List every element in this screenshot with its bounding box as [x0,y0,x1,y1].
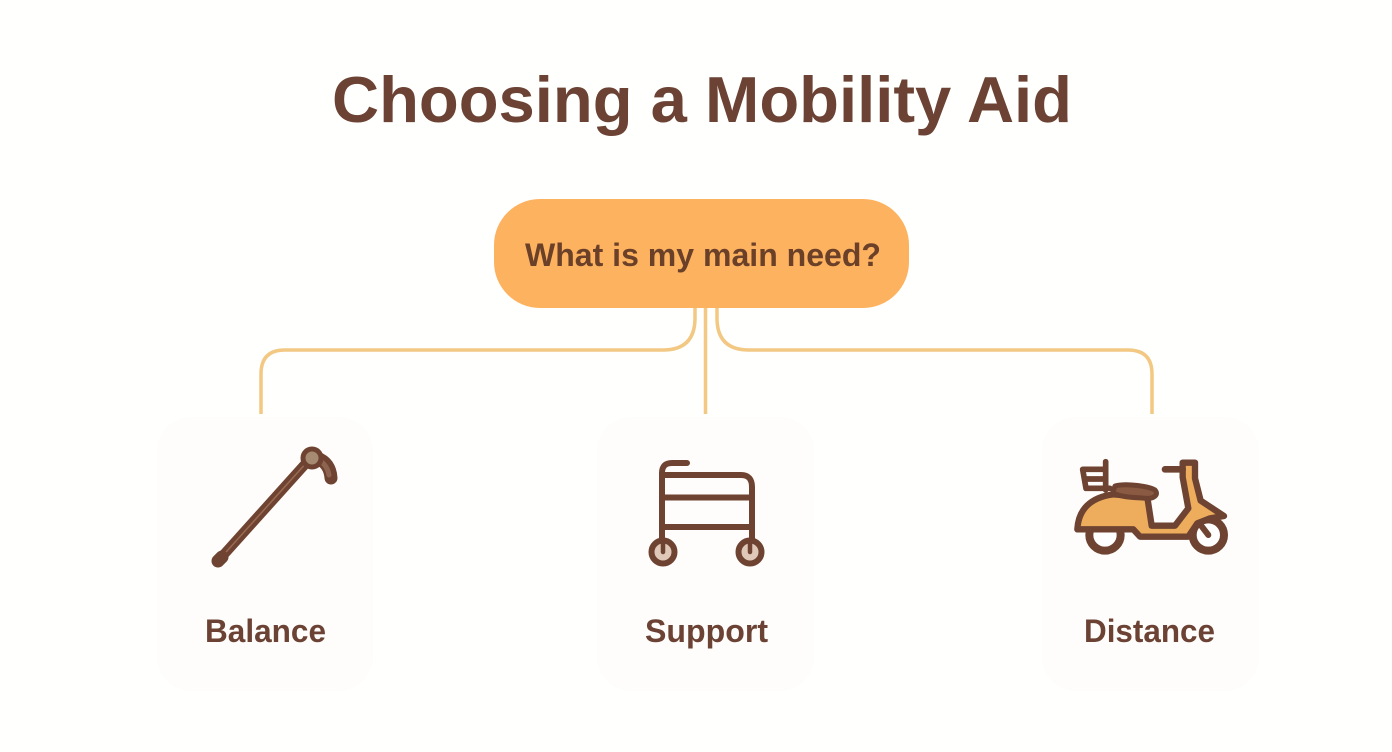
title: Choosing a Mobility Aid [332,63,1072,136]
label: distance: Distance [1084,613,1215,649]
panel: distance [1042,417,1259,691]
icon: walker [652,463,762,564]
icon: scooter [1077,462,1224,551]
connector lines [261,307,1152,414]
panel: support [597,417,814,691]
question node: What is my main need? [525,237,881,273]
panel: balance [157,417,373,691]
label: support: Support [645,613,768,649]
question node [494,199,909,308]
label: balance: Balance [205,613,326,649]
icon: cane [218,449,331,561]
